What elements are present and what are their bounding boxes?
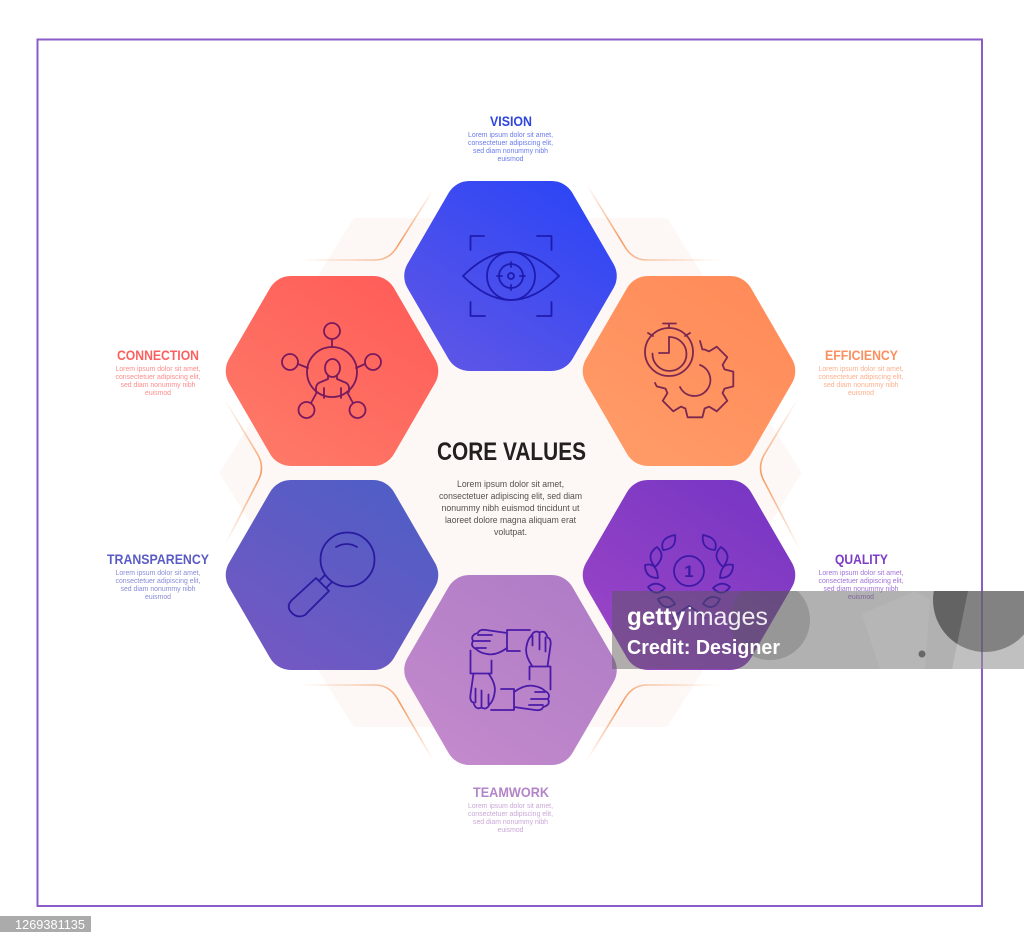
watermark text: images bbox=[687, 603, 768, 631]
label: quality: QUALITY bbox=[835, 551, 889, 567]
label: vision: Lorem ipsum dolor sit amet, bbox=[468, 132, 553, 139]
label: quality bbox=[818, 551, 904, 601]
label: efficiency: EFFICIENCY bbox=[825, 347, 899, 363]
hexagon: quality bbox=[583, 480, 795, 670]
icon: stopwatch and gear bbox=[645, 324, 733, 417]
hexagon: efficiency bbox=[583, 276, 795, 466]
label: transparency bbox=[107, 551, 210, 601]
icon: laurel with number one bbox=[645, 535, 733, 618]
label: connection bbox=[116, 347, 201, 397]
label: teamwork: TEAMWORK bbox=[473, 784, 549, 800]
icon: connected person network bbox=[282, 323, 381, 418]
image id tag bbox=[0, 916, 91, 932]
label: transparency: Lorem ipsum dolor sit amet, bbox=[116, 570, 201, 577]
label: vision: sed diam nonummy nibh bbox=[473, 148, 548, 155]
hexagon: connection bbox=[226, 276, 438, 466]
label: connection: Lorem ipsum dolor sit amet, bbox=[116, 366, 201, 373]
label: vision: consectetuer adipiscing elit, bbox=[468, 140, 553, 147]
label: connection: sed diam nonummy nibh bbox=[120, 382, 196, 389]
label: efficiency: Lorem ipsum dolor sit amet, bbox=[818, 366, 904, 373]
label: efficiency bbox=[818, 347, 904, 397]
label: teamwork: consectetuer adipiscing elit, bbox=[468, 811, 553, 818]
center description: laoreet dolore magna aliquam erat bbox=[445, 515, 576, 526]
icon: eye with target bbox=[463, 236, 559, 316]
label: teamwork: sed diam nonummy nibh bbox=[473, 819, 548, 826]
watermark text: Credit: Designer bbox=[627, 637, 780, 659]
label: transparency: sed diam nonummy nibh bbox=[120, 586, 196, 593]
label: efficiency: sed diam nonummy nibh bbox=[824, 382, 899, 389]
center title: CORE VALUES bbox=[437, 438, 586, 466]
label: quality: sed diam nonummy nibh bbox=[824, 586, 899, 593]
hexagon: teamwork bbox=[404, 575, 617, 765]
center description: consectetuer adipiscing elit, sed diam bbox=[439, 491, 582, 502]
label: efficiency: euismod bbox=[848, 390, 874, 397]
label: transparency: euismod bbox=[145, 594, 171, 601]
label: transparency: TRANSPARENCY bbox=[107, 551, 210, 567]
image id tag: 1269381135 bbox=[15, 918, 85, 932]
center description: Lorem ipsum dolor sit amet, bbox=[457, 479, 564, 490]
center description: volutpat. bbox=[494, 527, 527, 538]
label: quality: Lorem ipsum dolor sit amet, bbox=[818, 570, 904, 577]
label: vision bbox=[468, 113, 553, 163]
watermark text bbox=[627, 603, 780, 659]
watermark band bbox=[612, 591, 1024, 669]
label: teamwork: euismod bbox=[498, 827, 524, 834]
label: connection: consectetuer adipiscing elit, bbox=[116, 374, 201, 381]
pale background hexagons bbox=[224, 222, 797, 723]
label: efficiency: consectetuer adipiscing elit, bbox=[818, 374, 904, 381]
watermark text: getty bbox=[627, 603, 685, 631]
label: teamwork bbox=[468, 784, 553, 834]
label: teamwork: Lorem ipsum dolor sit amet, bbox=[468, 803, 553, 810]
label: vision: euismod bbox=[498, 156, 524, 163]
icon: four joined hands bbox=[470, 630, 551, 710]
label: transparency: consectetuer adipiscing elit, bbox=[116, 578, 201, 585]
center description bbox=[439, 479, 582, 538]
label: connection: euismod bbox=[145, 390, 171, 397]
icon: magnifying glass bbox=[289, 532, 374, 616]
label: quality: euismod bbox=[848, 594, 874, 601]
label: quality: consectetuer adipiscing elit, bbox=[818, 578, 904, 585]
label: connection: CONNECTION bbox=[117, 347, 199, 363]
center description: nonummy nibh euismod tincidunt ut bbox=[442, 503, 580, 514]
label: vision: VISION bbox=[490, 113, 532, 129]
orange connector curves bbox=[225, 185, 800, 760]
icon: number one: 1 bbox=[684, 562, 694, 581]
hexagon: vision bbox=[404, 181, 617, 371]
hexagon: transparency bbox=[226, 480, 438, 670]
